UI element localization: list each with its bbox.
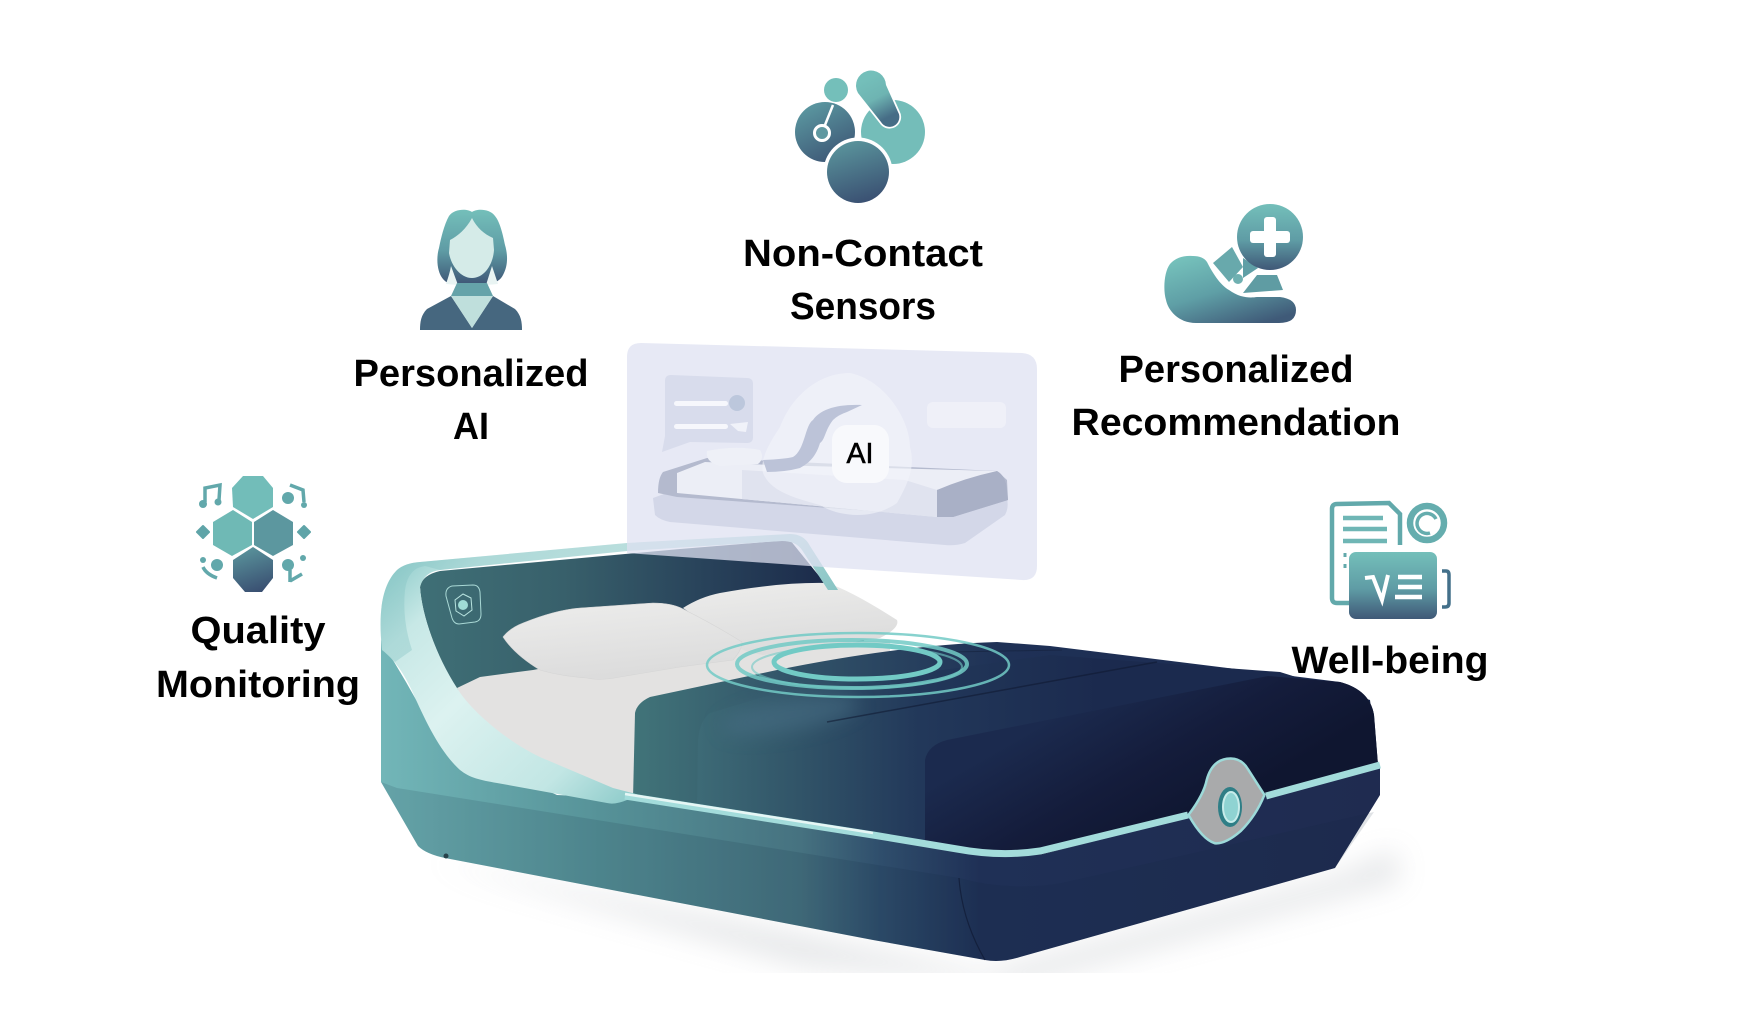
infographic: smart bed with five feature icons [158,70,1486,973]
hologram AI panel [627,343,1037,580]
side control button [1190,760,1263,842]
bed shadow [568,852,1400,973]
label: personalized recommendation [1072,349,1400,444]
swoosh in halo [763,405,862,472]
front pillow [503,603,742,679]
duvet [633,642,1378,855]
back pillow [683,583,897,655]
label: non-contact sensors: Sensors [790,286,936,328]
icon: quality monitoring [197,476,310,592]
bed base [381,640,1380,961]
headboard panel [420,540,870,705]
glowing stripe [625,765,1380,854]
chat card [662,375,753,452]
label: personalized AI: AI [453,406,489,448]
label: non-contact sensors [743,233,983,328]
label: personalized AI: Personalized [354,353,588,395]
label: non-contact sensors: Non-Contact [743,233,983,275]
bed illustration [381,534,1400,985]
AI badge: AI [846,438,874,470]
icon: personalized recommendation [1164,204,1303,323]
label: personalized recommendation: Recommendation [1072,402,1400,444]
status pill [927,402,1006,428]
label: quality monitoring: Monitoring [156,664,360,706]
AI badge [832,425,889,483]
icon: non-contact sensors [795,71,925,206]
icon: well-being report [1332,503,1449,619]
label: personalized AI [354,353,588,448]
halo [762,373,912,515]
mini bed [653,448,1008,545]
light swoosh rim [381,534,838,804]
label: well-being: Well-being [1292,640,1488,682]
sheet [457,640,890,800]
label: quality monitoring: Quality [190,610,326,652]
label: quality monitoring [156,610,360,706]
sensor rings [707,633,1009,697]
label: personalized recommendation: Personalized [1118,349,1354,391]
icon: personalized AI person [420,210,522,330]
headboard touch icon [446,585,481,624]
